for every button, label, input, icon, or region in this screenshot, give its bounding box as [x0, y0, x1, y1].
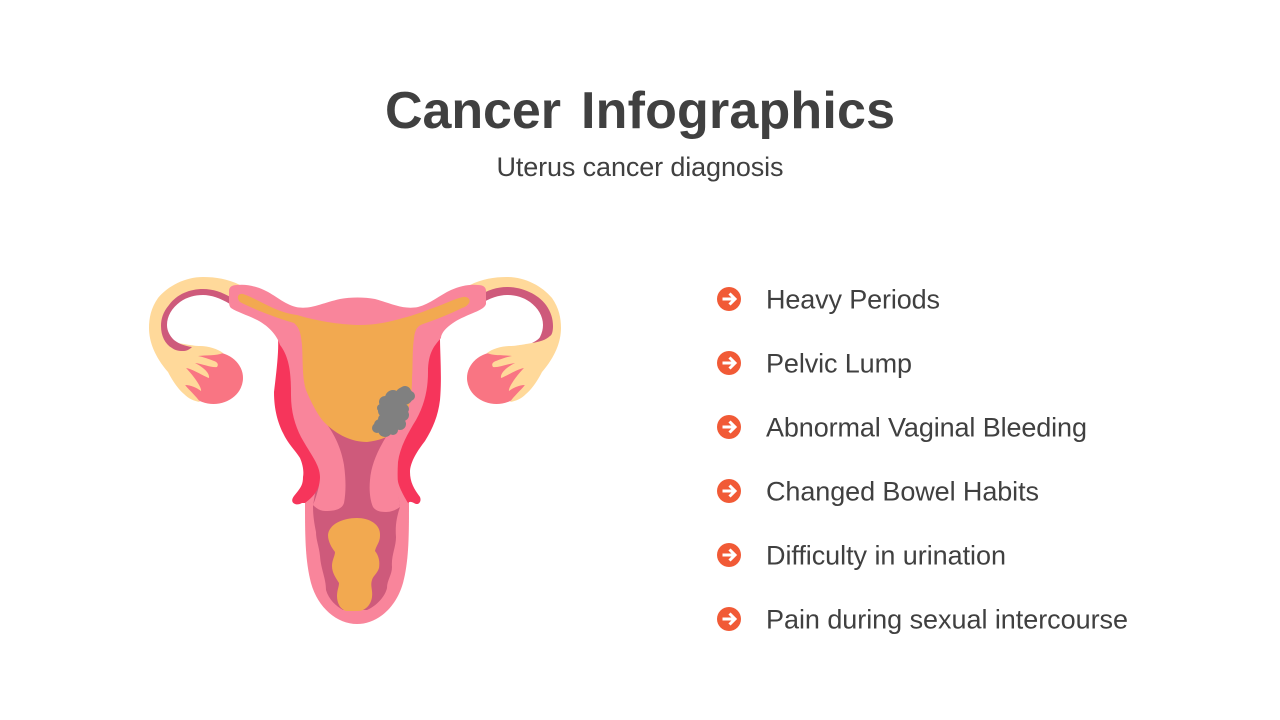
vaginal canal — [313, 424, 400, 610]
right artery — [394, 338, 441, 504]
item: Heavy Periods: Heavy Periods — [766, 284, 940, 314]
tube canal — [478, 287, 553, 343]
right fallopian tube and ovary — [467, 277, 561, 404]
icon: arrow bullet — [717, 543, 741, 567]
illustration: uterus anatomy — [149, 277, 561, 624]
item: Changed Bowel Habits: Changed Bowel Habits — [766, 476, 1039, 506]
cervix — [328, 518, 380, 611]
tumor — [372, 386, 415, 437]
tube canal — [161, 289, 232, 351]
left artery — [274, 338, 321, 504]
vaginal wall — [305, 470, 409, 624]
item: Pelvic Lump: Pelvic Lump — [766, 348, 912, 378]
icon: arrow bullet — [717, 415, 741, 439]
left fallopian tube and ovary — [149, 277, 243, 404]
title: Infographics — [581, 82, 895, 140]
icon: arrow bullet — [717, 607, 741, 631]
icon: arrow bullet — [717, 287, 741, 311]
subtitle: Uterus cancer diagnosis — [496, 152, 784, 182]
item: Difficulty in urination: Difficulty in urination — [766, 540, 1006, 570]
uterine cavity — [238, 294, 470, 442]
title: Cancer — [385, 82, 561, 140]
uterus body — [229, 285, 486, 512]
ovary — [467, 352, 526, 404]
fimbriae and tube sheath — [149, 277, 240, 402]
fimbriae and tube sheath — [470, 277, 561, 402]
ovary — [184, 352, 243, 404]
symptom list — [717, 284, 1128, 634]
item: Abnormal Vaginal Bleeding: Abnormal Vaginal Bleeding — [766, 412, 1087, 442]
item: Pain during sexual intercourse: Pain during sexual intercourse — [766, 604, 1128, 634]
icon: arrow bullet — [717, 351, 741, 375]
icon: arrow bullet — [717, 479, 741, 503]
